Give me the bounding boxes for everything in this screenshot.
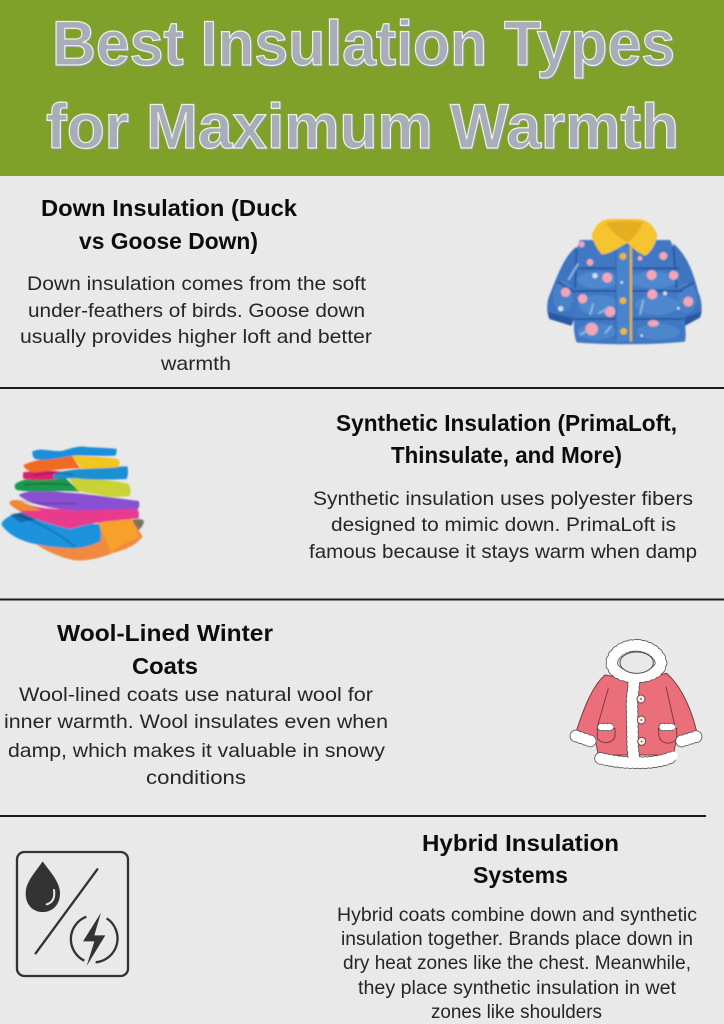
text: synthetic insulation description: Synthetic insulation uses polyester fibers [313,488,693,510]
heading: down insulation: Down Insulation (Duck [41,195,297,221]
text: down insulation description: Down insulation comes from the soft [27,273,367,295]
heading: down insulation: vs Goose Down) [79,228,258,254]
heading: synthetic insulation: Thinsulate, and More) [391,442,622,468]
text: synthetic insulation description: famous because it stays warm when damp [309,541,697,563]
heading: hybrid insulation systems: Hybrid Insulation [422,830,619,856]
heading: synthetic insulation: Synthetic Insulation (PrimaLoft, [336,410,677,436]
text: synthetic insulation description: designed to mimic down. PrimaLoft is [331,514,676,536]
icon: water drop and power symbol [17,852,128,976]
heading: wool-lined winter coats: Coats [132,653,198,679]
heading: wool-lined winter coats [57,620,273,679]
heading: hybrid insulation systems [422,830,619,888]
text: wool-lined coats description: Wool-lined coats use natural wool for [19,684,374,706]
panel: wool-lined coats [4,620,697,789]
text: hybrid insulation description [337,904,697,1023]
panel: down insulation [20,195,702,375]
text: wool-lined coats description: inner warmth. Wool insulates even when [4,711,388,733]
title banner: for Maximum Warmth [46,92,679,162]
icon: pink coat with white fur trim [576,645,697,763]
panel: synthetic insulation [1,410,697,563]
text: down insulation description [20,273,373,375]
text: wool-lined coats description: damp, which makes it valuable in snowy [8,740,385,762]
text: down insulation description: warmth [160,353,231,375]
title banner: Best Insulation Types [52,9,675,79]
text: hybrid insulation description: they place synthetic insulation in wet [358,977,677,999]
icon: blue floral puffer jacket [547,219,702,344]
heading: synthetic insulation [336,410,677,468]
text: hybrid insulation description: insulation together. Brands place down in [341,928,693,950]
heading: wool-lined winter coats: Wool-Lined Winter [57,620,273,646]
icon: stack of colorful clothes [1,446,144,560]
text: synthetic insulation description [309,488,697,563]
heading: down insulation [41,195,297,254]
text: hybrid insulation description: Hybrid coats combine down and synthetic [337,904,697,926]
heading: hybrid insulation systems: Systems [473,862,568,888]
text: down insulation description: under-feathers of birds. Goose down [28,300,365,322]
text: down insulation description: usually provides higher loft and better [20,326,373,348]
title banner [0,0,724,176]
text: wool-lined coats description [4,684,388,789]
text: hybrid insulation description: zones like shoulders [431,1001,602,1023]
text: wool-lined coats description: conditions [146,767,246,789]
text: hybrid insulation description: dry heat zones like the chest. Meanwhile, [343,952,691,974]
panel: hybrid insulation [17,830,697,1023]
